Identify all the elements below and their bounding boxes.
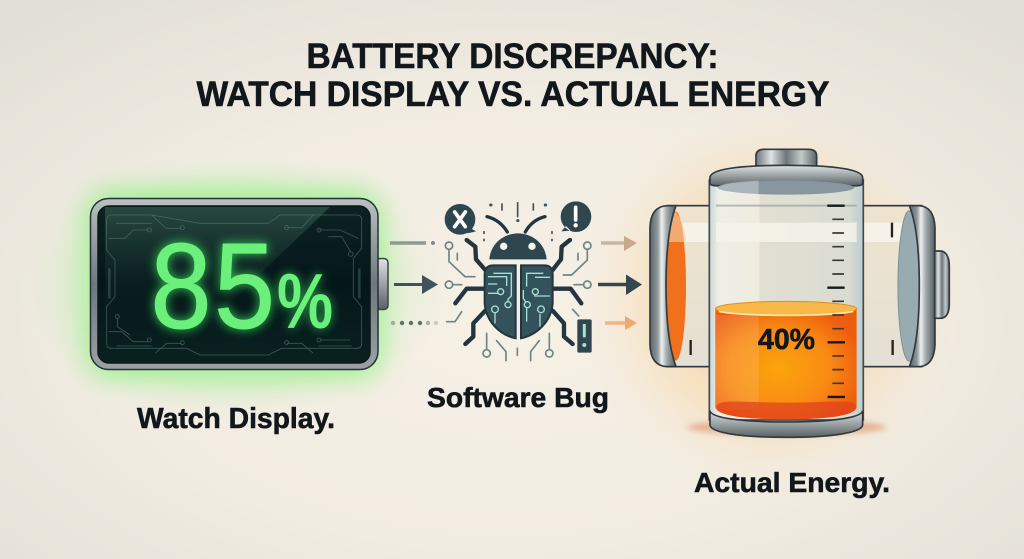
digits 85% glow: 5 <box>214 218 275 354</box>
digital reading 85% <box>150 218 333 354</box>
battery terminal nub <box>376 258 388 310</box>
battery screen <box>98 206 370 363</box>
floor shadow <box>687 419 887 435</box>
left metal cap <box>650 206 676 367</box>
digits 85% glow: 8 <box>150 218 212 354</box>
orange end disc <box>665 211 686 361</box>
bug legs and antennae <box>455 217 581 344</box>
icon: software bug <box>445 201 592 361</box>
icon: actual energy battery <box>650 149 949 437</box>
bug left wing <box>485 265 516 338</box>
top cap <box>710 165 863 195</box>
top terminal <box>756 149 817 166</box>
battery casing <box>90 198 378 370</box>
scale ticks <box>827 206 845 397</box>
digital reading 85%: % <box>277 257 333 345</box>
digits 85% glow: % <box>277 257 333 345</box>
digital reading 85%: 5 <box>214 218 275 354</box>
right terminal <box>935 251 949 318</box>
error bubble <box>445 204 476 235</box>
label: software bug: Software Bug <box>427 382 609 413</box>
icon: watch display battery <box>90 198 388 370</box>
warning bubble <box>561 201 591 232</box>
bottom cap <box>710 411 863 437</box>
bug right wing <box>521 265 553 338</box>
grey end disc <box>898 211 921 361</box>
wing circuits <box>488 273 550 327</box>
digits 85% glow <box>150 218 333 354</box>
arrow group: display to bug <box>390 241 438 325</box>
title: WATCH DISPLAY VS. ACTUAL ENERGY <box>196 75 830 114</box>
screen glare <box>105 207 330 330</box>
title <box>196 37 830 114</box>
horizontal battery body <box>650 206 949 367</box>
digital reading 85%: 8 <box>150 218 212 354</box>
bug head <box>489 233 547 259</box>
alert tag <box>577 319 592 353</box>
liquid <box>715 301 857 419</box>
label: actual energy: Actual Energy. <box>694 467 890 498</box>
circuit traces <box>107 215 362 355</box>
title: BATTERY DISCREPANCY: <box>306 37 718 76</box>
label: 40%: 40% <box>758 324 815 356</box>
label: watch display: Watch Display. <box>137 403 335 435</box>
arrow group: bug to energy <box>598 236 642 330</box>
surrounding circuit marks <box>445 203 591 361</box>
glass cylinder <box>709 180 863 420</box>
right metal cap <box>909 206 935 367</box>
